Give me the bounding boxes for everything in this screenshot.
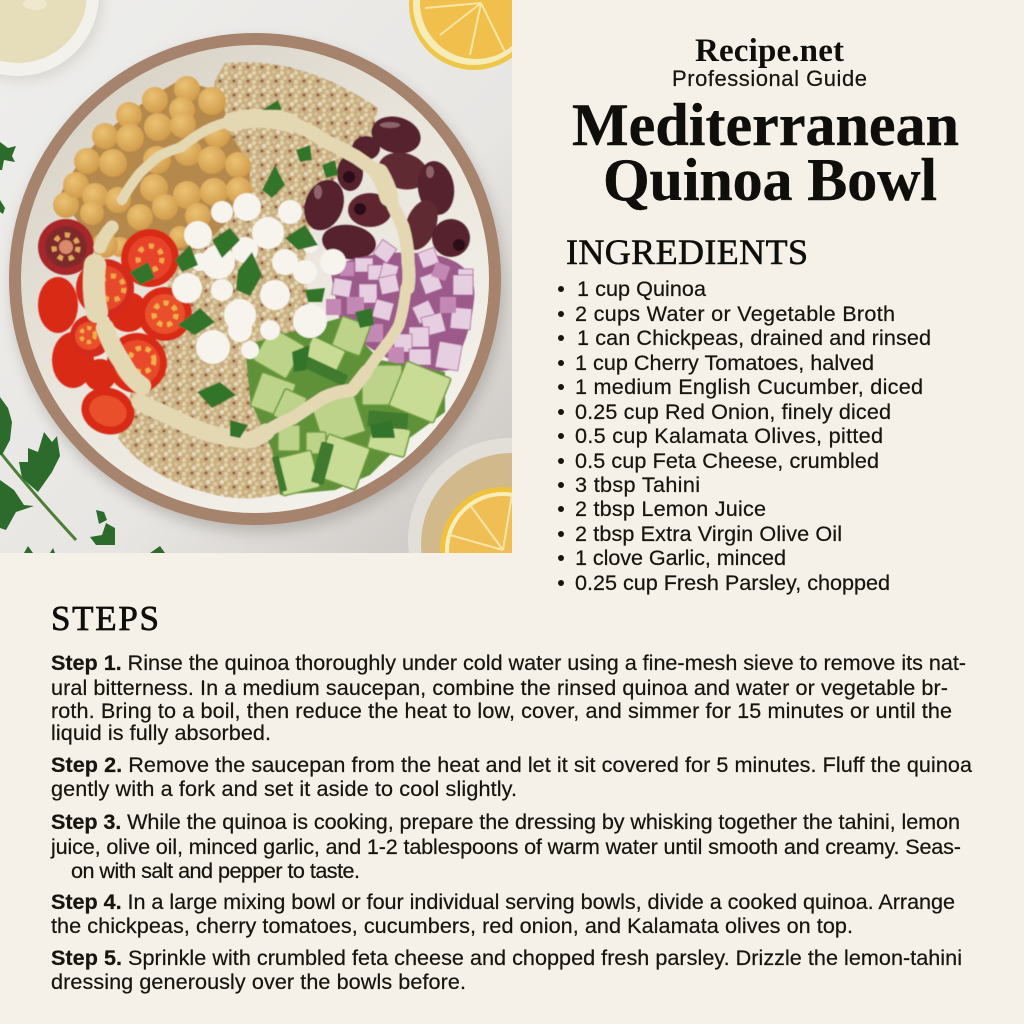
step 5 — [51, 945, 962, 994]
header — [572, 33, 959, 213]
red onion — [326, 239, 474, 371]
tomato half — [121, 229, 179, 287]
step 4 — [51, 889, 955, 938]
chickpea shadow base — [60, 80, 250, 255]
tomato half — [107, 333, 167, 393]
step 1: Step 1. Rinse the quinoa thoroughly under cold water using a fine-mesh sieve to remove its nat- — [51, 650, 966, 675]
brand name: Recipe.net — [695, 33, 844, 69]
whole tomato pieces — [38, 277, 148, 391]
tomato half — [138, 287, 192, 341]
step 5: Step 5. Sprinkle with crumbled feta cheese and chopped fresh parsley. Drizzle the lemon-tahini — [51, 945, 962, 970]
ingredients list: 0.5 cup Kalamata Olives, pitted — [575, 423, 883, 448]
cherry tomatoes — [38, 219, 192, 442]
ingredients list: 0.5 cup Feta Cheese, crumbled — [575, 448, 879, 473]
bowl — [9, 33, 504, 532]
tahini dressing drizzle — [94, 118, 409, 440]
ingredients panel — [558, 232, 931, 595]
title — [572, 92, 959, 213]
step 2: gently with a fork and set it aside to cool slightly. — [51, 776, 517, 801]
ingredients list: 1 cup Quinoa — [577, 276, 707, 301]
kalamata olives — [297, 111, 470, 263]
step 1: roth. Bring to a boil, then reduce the heat to low, cover, and simmer for 15 minutes or until the — [51, 698, 952, 723]
ingredients heading: INGREDIENTS — [566, 232, 808, 272]
step 2 — [51, 752, 973, 801]
ingredients list: 2 cups Water or Vegetable Broth — [575, 301, 895, 326]
ingredients list — [558, 276, 931, 595]
tomato half dark — [38, 219, 94, 275]
bowl interior — [21, 45, 489, 513]
ingredients list: 2 tbsp Extra Virgin Olive Oil — [575, 521, 842, 546]
parsley sprig left — [0, 142, 165, 553]
step 3: juice, olive oil, minced garlic, and 1-2 tablespoons of warm water until smooth and creamy. Seas- — [50, 834, 961, 859]
ingredients list: 2 tbsp Lemon Juice — [575, 496, 766, 521]
step 3: Step 3. While the quinoa is cooking, prepare the dressing by whisking together the tahini, lemon — [51, 809, 960, 834]
main drizzle — [232, 118, 290, 123]
cucumber — [245, 316, 451, 496]
bowl rim — [9, 33, 501, 525]
chickpeas — [53, 76, 252, 258]
lemon half top — [409, 0, 512, 70]
bowl cast shadow — [12, 40, 504, 532]
tomato wedge — [80, 387, 136, 436]
photo: quinoa bowl on marble — [0, 0, 512, 553]
ingredients list: 1 can Chickpeas, drained and rinsed — [577, 325, 931, 350]
side bowl of tahini — [0, 0, 102, 80]
title: Quinoa Bowl — [603, 147, 937, 213]
crumbled feta — [172, 193, 346, 364]
tomato drizzle — [94, 265, 97, 312]
step 4: Step 4. In a large mixing bowl or four individual serving bowls, divide a cooked quinoa. Arrange — [51, 889, 955, 914]
step 3 — [50, 809, 961, 883]
step 4: the chickpeas, cherry tomatoes, cucumbers, red onion, and Kalamata olives on top. — [51, 913, 853, 938]
ingredients list: 1 clove Garlic, minced — [575, 545, 786, 570]
subtitle: Professional Guide — [672, 66, 867, 91]
marble surface — [0, 0, 512, 553]
ingredients list: 1 medium English Cucumber, diced — [575, 374, 923, 399]
chickpea drizzle — [122, 120, 240, 200]
step 1: ural bitterness. In a medium saucepan, combine the rinsed quinoa and water or vegetable br- — [51, 675, 948, 700]
title: Mediterranean — [572, 92, 959, 158]
ingredients list: 0.25 cup Red Onion, finely diced — [575, 399, 891, 424]
steps heading: STEPS — [51, 599, 159, 638]
tomato half — [70, 316, 104, 357]
parsley garnish — [130, 100, 395, 438]
quinoa — [118, 62, 378, 498]
step 2: Step 2. Remove the saucepan from the heat and let it sit covered for 5 minutes. Fluff the quinoa — [51, 752, 973, 777]
ingredients list: 1 cup Cherry Tomatoes, halved — [575, 350, 874, 375]
side bowl with lemon — [408, 438, 512, 553]
bowl food — [38, 62, 474, 498]
step 5: dressing generously over the bowls before. — [51, 969, 466, 994]
step 1: liquid is fully absorbed. — [51, 720, 271, 745]
step 3: on with salt and pepper to taste. — [71, 858, 360, 883]
step 1 — [51, 650, 966, 745]
steps panel — [50, 599, 973, 994]
tomato half — [76, 259, 134, 317]
ingredients list: 3 tbsp Tahini — [575, 472, 700, 497]
ingredients list: 0.25 cup Fresh Parsley, chopped — [575, 570, 890, 595]
